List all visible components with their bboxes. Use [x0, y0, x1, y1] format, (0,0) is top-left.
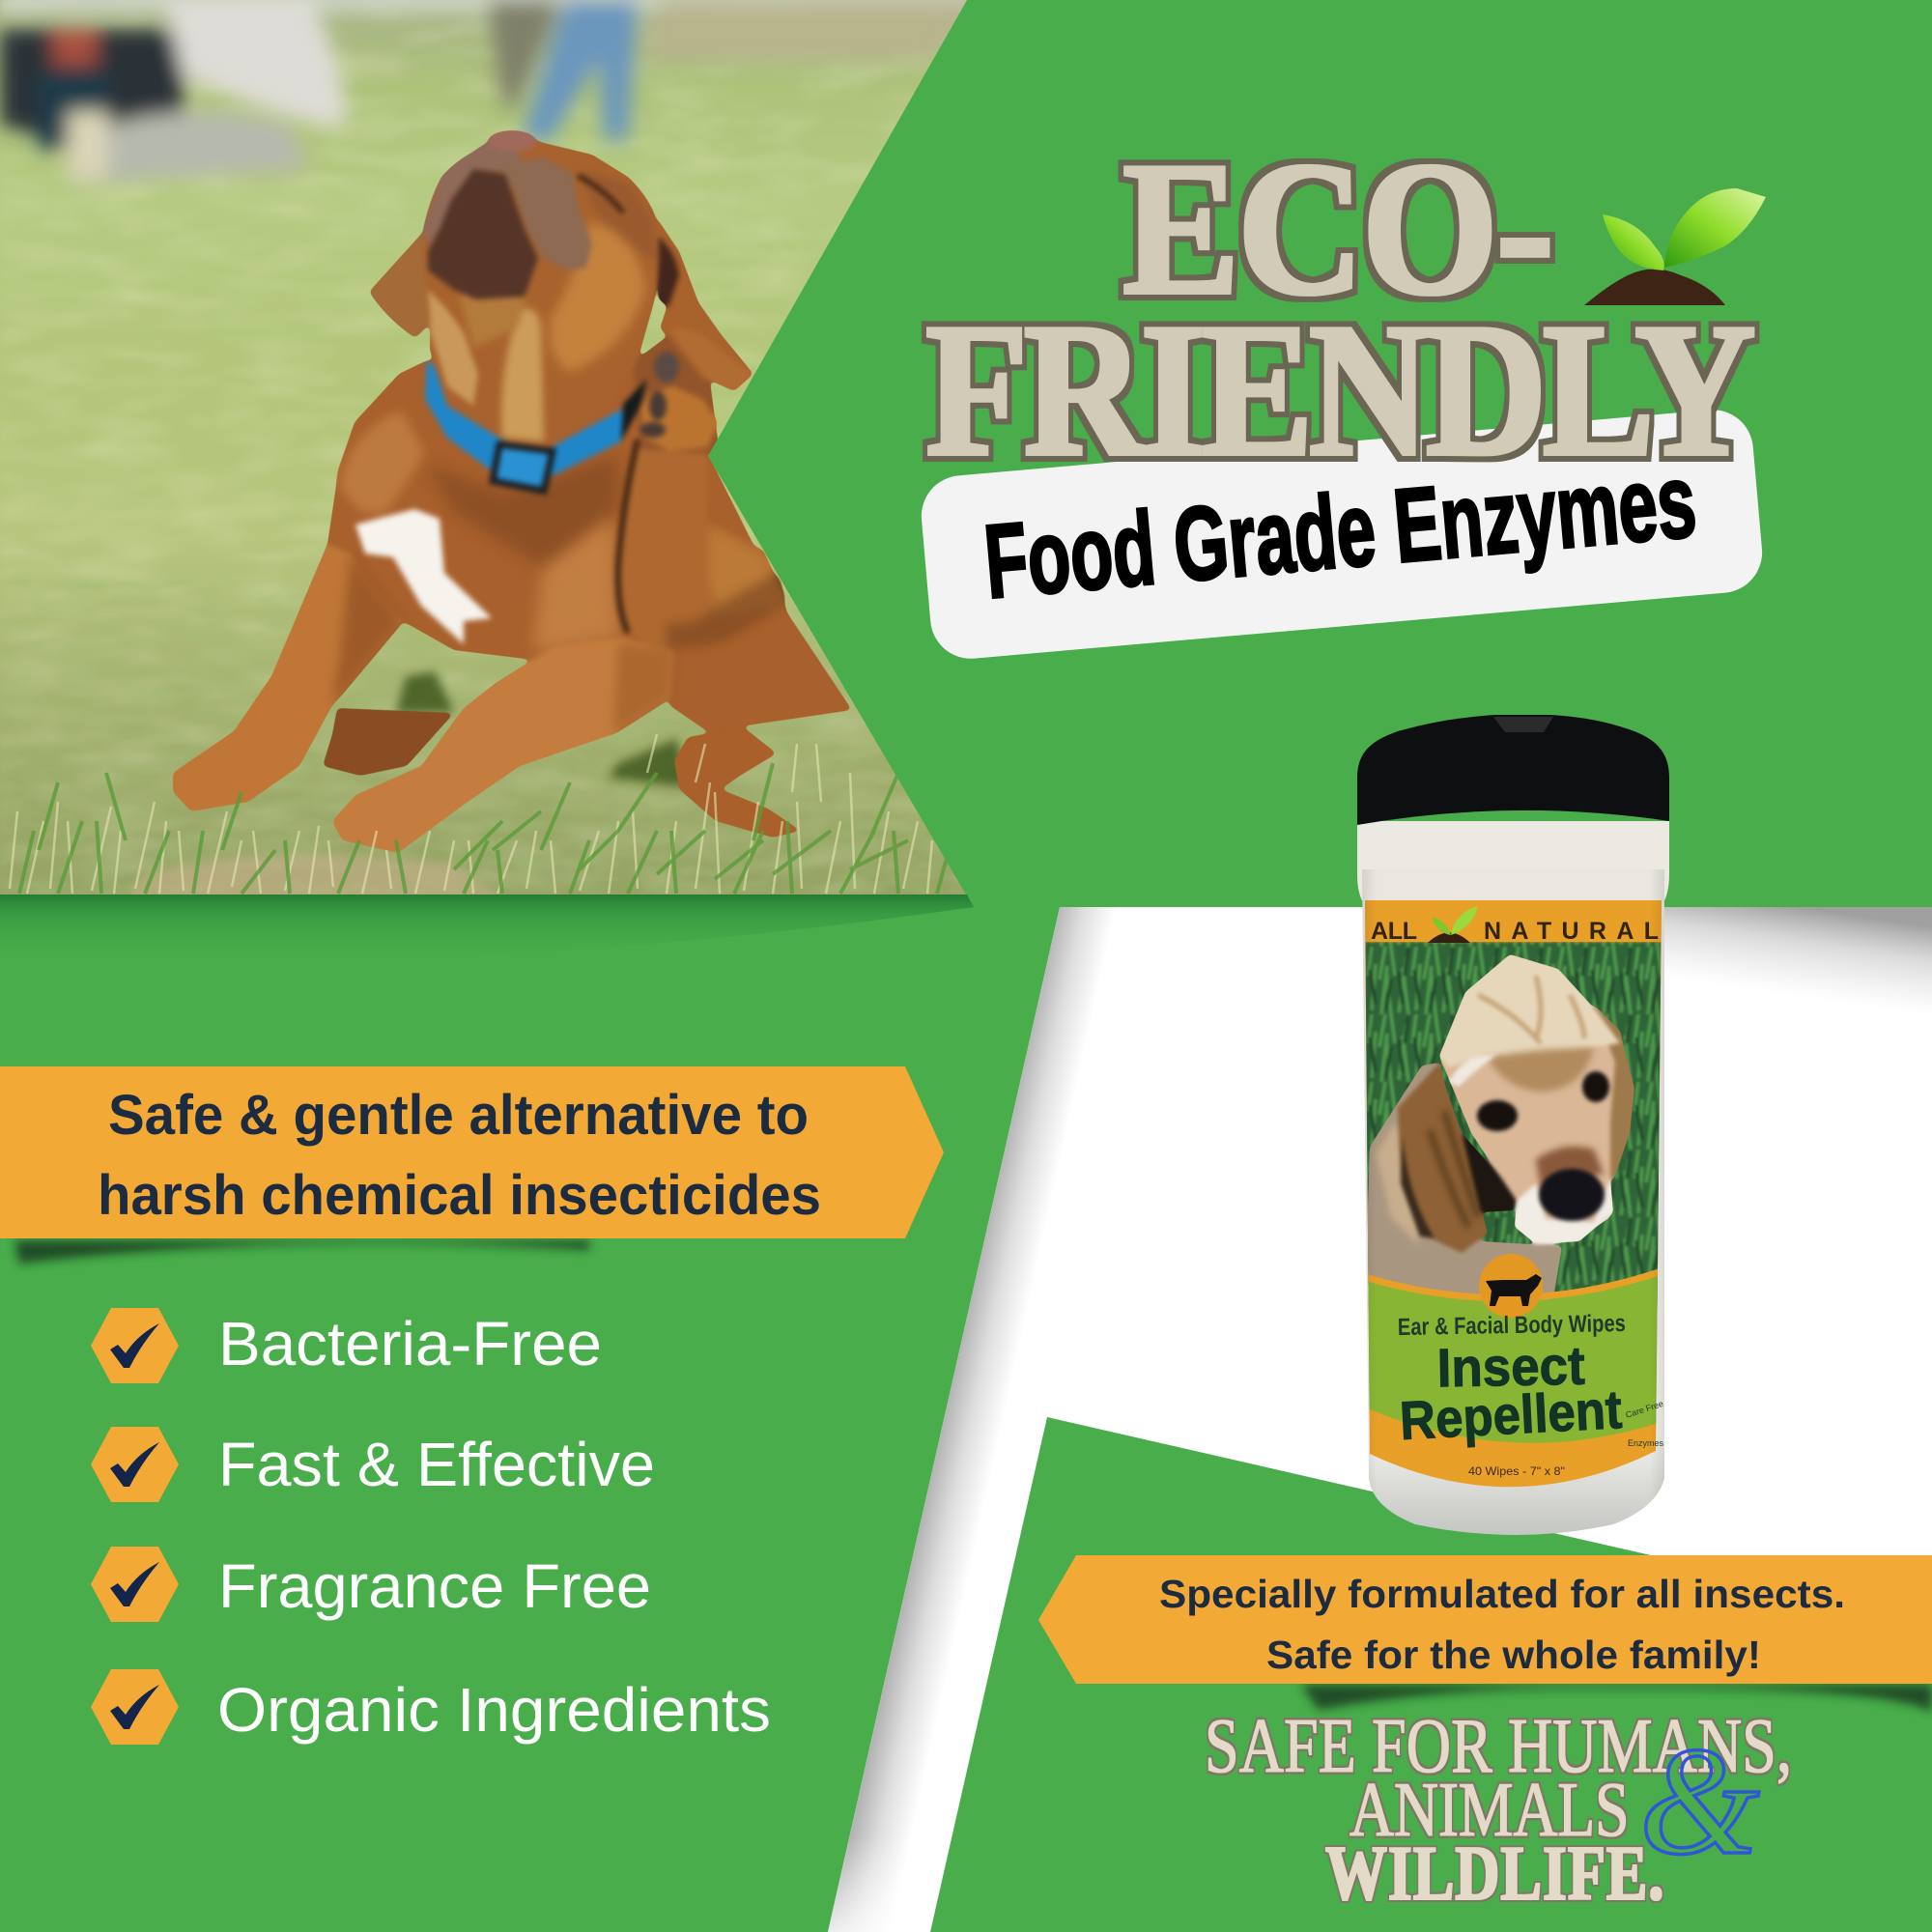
head — [417, 137, 663, 363]
label text: ear and facial body wipes: Ear & Facial Body Wipes — [1398, 1310, 1626, 1341]
benefit label: Fast & Effective — [218, 1430, 655, 1499]
foreground grass blades — [10, 734, 932, 894]
benefit label: Organic Ingredients — [217, 1675, 771, 1745]
label text: repellent: Repellent — [1398, 1378, 1623, 1451]
label dog muzzle — [1515, 1179, 1613, 1244]
canister shading — [1362, 869, 1664, 1535]
statement line 2: ANIMALS — [1350, 1766, 1630, 1853]
white pill badge — [918, 407, 1766, 662]
right banner shadow — [1301, 1685, 1932, 1712]
neck cream stripe — [501, 308, 544, 441]
statement line 3: WILDLIFE. — [1325, 1830, 1663, 1917]
shadows on grass under puppy — [396, 671, 691, 787]
product: wipes canister — [1357, 715, 1669, 1535]
label dog hair — [1439, 954, 1620, 1067]
paw — [640, 386, 718, 451]
icon: sprout — [1584, 188, 1766, 305]
paw claw — [654, 352, 679, 383]
photo: puppy scratching in grass — [0, 0, 977, 898]
label heading: all natural — [1371, 918, 1659, 945]
forehead shading — [585, 172, 659, 257]
hind leg — [674, 727, 801, 838]
label dog badge — [1479, 1254, 1543, 1318]
right banner — [1038, 1555, 1932, 1684]
leg crease — [618, 440, 638, 633]
benefit: bacteria-free — [91, 1308, 602, 1383]
right front leg — [332, 638, 674, 853]
label green band — [1365, 1271, 1662, 1443]
shadow under photo — [0, 895, 974, 962]
closed eye — [578, 176, 623, 213]
paw pads — [649, 391, 667, 420]
label dog ear right — [1594, 1005, 1634, 1181]
label dog artwork — [1365, 954, 1634, 1304]
left banner shadow — [14, 1240, 589, 1264]
benefit: organic ingredients — [91, 1669, 771, 1745]
canister body — [1362, 869, 1664, 1535]
label heading: all natural: NATURAL — [1484, 918, 1659, 945]
lid flip tab — [1493, 717, 1553, 732]
benefit: fast and effective — [91, 1427, 655, 1502]
neck side fold — [428, 290, 478, 406]
label orange band top — [1365, 898, 1662, 942]
under muzzle band — [459, 295, 526, 348]
label sprout icon — [1428, 906, 1478, 943]
behind paw fill — [633, 333, 720, 454]
label dog head — [1439, 954, 1615, 1243]
nose — [488, 130, 536, 152]
label text: brand: Care Free — [1625, 1399, 1664, 1420]
left front leg — [173, 544, 403, 811]
collar strap — [621, 379, 647, 441]
banner text line 2: harsh chemical insecticides — [98, 1164, 821, 1227]
soil patch — [126, 855, 502, 898]
torso — [327, 360, 852, 731]
label dog snout — [1536, 1147, 1604, 1188]
safety statement — [1205, 1702, 1792, 1917]
canister collar — [1357, 821, 1669, 904]
right ear — [655, 215, 753, 391]
puppy — [173, 130, 852, 853]
dark chin — [428, 169, 538, 299]
label dog nose — [1539, 1169, 1605, 1221]
benefit: fragrance free — [91, 1547, 651, 1622]
chest shade under collar — [425, 454, 618, 570]
label text: brand — [1625, 1399, 1664, 1448]
icon: hexagon check — [91, 1669, 179, 1745]
label dog forehead band — [1488, 1048, 1594, 1092]
lit haunch — [710, 526, 784, 618]
icon: hexagon check — [91, 1427, 179, 1502]
left banner — [0, 1066, 944, 1238]
label dog dark shadow — [1462, 1133, 1517, 1212]
banner text line 1: Specially formulated for all insects. — [1159, 1572, 1845, 1616]
canister lid — [1357, 715, 1669, 825]
label dog eyes — [1477, 1100, 1518, 1131]
benefit label: Fragrance Free — [218, 1551, 651, 1621]
rear paw — [323, 708, 454, 776]
collar buckle — [493, 444, 553, 491]
blue collar — [425, 360, 628, 480]
label dog ear left — [1398, 1063, 1488, 1253]
label dog white brow — [1449, 1055, 1497, 1087]
leg fold shadow — [667, 570, 787, 649]
label text: insect: Insect — [1436, 1335, 1585, 1398]
banner text line 1: Safe & gentle alternative to — [108, 1084, 809, 1147]
banner text line 2: Safe for the whole family! — [1266, 1633, 1761, 1677]
statement line 1: SAFE FOR HUMANS, — [1205, 1702, 1792, 1789]
ear flap over paw — [669, 327, 753, 391]
label photo: grass — [1365, 942, 1662, 1309]
jowl flap — [499, 157, 592, 270]
statement ampersand: & — [1639, 1715, 1759, 1887]
label heading: all natural: ALL — [1371, 918, 1417, 945]
panel: headline — [918, 123, 1766, 662]
label text: wipes count: 40 Wipes - 7" x 8" — [1468, 1464, 1565, 1478]
product label — [1365, 898, 1662, 1517]
icon: hexagon check — [91, 1547, 179, 1622]
left ear — [369, 232, 430, 338]
cheek light — [550, 222, 645, 372]
icon: hexagon check — [91, 1308, 179, 1383]
chest light — [533, 517, 618, 652]
benefit label: Bacteria-Free — [218, 1309, 602, 1378]
panel: white diagonal area — [828, 907, 1932, 1932]
blurred background objects — [0, 0, 977, 184]
label dog body — [1365, 1063, 1562, 1304]
raised scratching leg — [630, 459, 784, 640]
lip band — [423, 135, 522, 246]
shoulder light — [340, 411, 425, 514]
white chest patch — [355, 509, 492, 644]
heading line: eco: ECO- — [1122, 123, 1554, 335]
heading line: friendly: FRIENDLY — [925, 285, 1756, 497]
label text: brand: Enzymes — [1628, 1438, 1664, 1448]
